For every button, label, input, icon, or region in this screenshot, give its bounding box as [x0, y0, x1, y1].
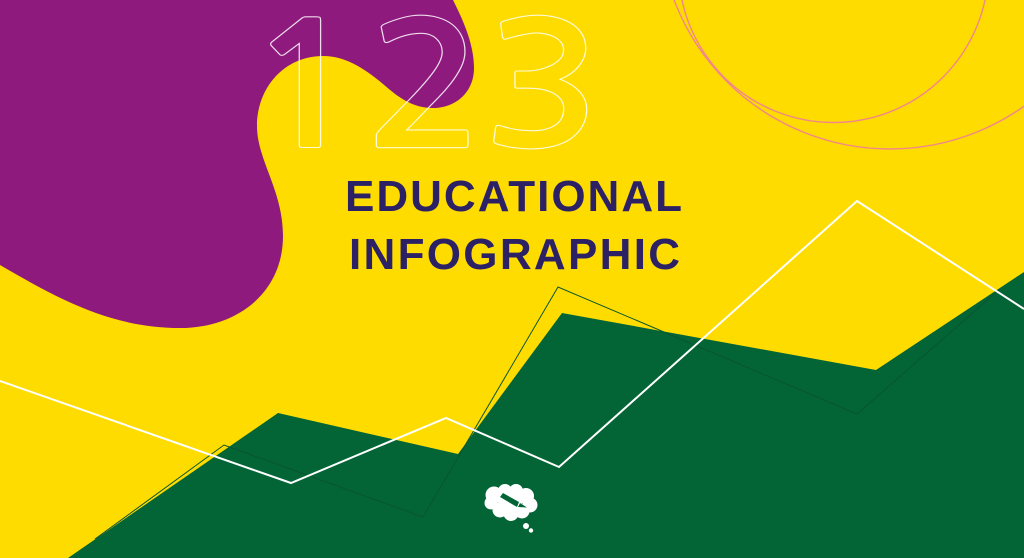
green area chart: [68, 272, 1024, 558]
white line: [0, 201, 1024, 483]
title: INFOGRAPHIC: [349, 230, 680, 279]
outlined numerals 123: 1: [245, 2, 366, 173]
icon: brain with pencil: [484, 484, 538, 533]
outlined numerals 123: 2: [365, 2, 486, 173]
title: EDUCATIONAL: [345, 172, 682, 221]
pink circles: [659, 0, 1024, 149]
title: [345, 172, 682, 279]
thin dark green line: [95, 287, 1000, 539]
outlined numerals 123: 3: [482, 2, 603, 173]
purple blob: [0, 0, 474, 328]
outlined numerals 123: [245, 2, 603, 173]
